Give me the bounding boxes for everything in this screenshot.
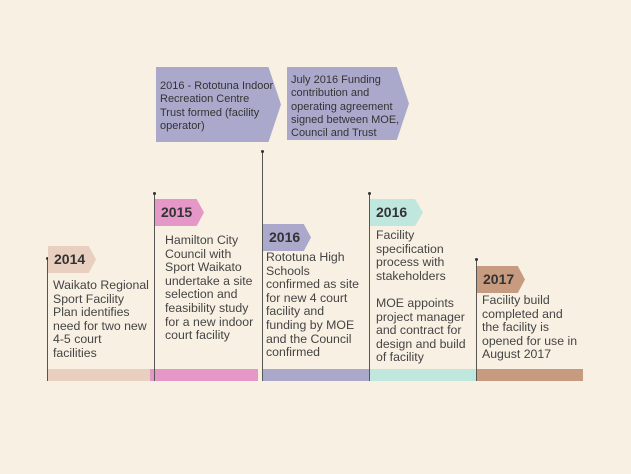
milestone 2014: 4-5 court bbox=[53, 332, 102, 346]
milestone 2016 specification: Facility bbox=[376, 228, 414, 242]
milestone 2014: 2014 bbox=[54, 251, 85, 267]
milestone 2016 high schools bbox=[263, 224, 359, 359]
milestone 2016 high schools: facility and bbox=[266, 304, 324, 318]
top box: funding agreement: operating agreement bbox=[291, 101, 393, 113]
milestone 2015: 2015 bbox=[161, 204, 192, 220]
milestone 2014: facilities bbox=[53, 346, 97, 360]
milestone 2017: August 2017 bbox=[482, 347, 551, 361]
milestone 2017 bbox=[477, 266, 577, 361]
milestone 2016 high schools: for new 4 court bbox=[266, 291, 347, 305]
top box: trust formed: operator) bbox=[160, 120, 205, 132]
milestone 2016 high schools: and the Council bbox=[266, 332, 351, 346]
milestone 2017: 2017 bbox=[483, 271, 514, 287]
top box: trust formed: Trust formed (facility bbox=[160, 107, 259, 119]
top box: funding agreement: July 2016 Funding bbox=[291, 74, 381, 86]
milestone 2016 specification: 2016 bbox=[376, 204, 407, 220]
milestone 2017: opened for use in bbox=[482, 334, 577, 348]
milestone 2016 specification: and contract for bbox=[376, 323, 461, 337]
milestone 2017: Facility build bbox=[482, 293, 550, 307]
milestone 2016 specification: stakeholders bbox=[376, 269, 446, 283]
milestone 2015: selection and bbox=[165, 287, 237, 301]
milestone 2014: Waikato Regional bbox=[53, 278, 149, 292]
milestone 2016 high schools: 2016 bbox=[269, 229, 300, 245]
milestone 2014: need for two new bbox=[53, 319, 147, 333]
milestone 2016 specification: of facility bbox=[376, 350, 424, 364]
milestone 2014 bbox=[48, 246, 149, 360]
top box: trust formed: Recreation Centre bbox=[160, 93, 249, 105]
milestone 2015: undertake a site bbox=[165, 274, 253, 288]
milestone 2017: the facility is bbox=[482, 320, 549, 334]
milestone 2016 specification bbox=[370, 199, 466, 364]
top box: funding agreement: signed between MOE, bbox=[291, 114, 399, 126]
top box: trust formed bbox=[156, 67, 281, 142]
top box: funding agreement bbox=[287, 67, 409, 140]
milestone 2016 specification: process with bbox=[376, 255, 444, 269]
milestone 2017: completed and bbox=[482, 307, 563, 321]
timeline bar bbox=[48, 369, 583, 381]
top box: funding agreement: contribution and bbox=[291, 87, 369, 99]
milestone 2016 high schools: Schools bbox=[266, 264, 310, 278]
milestone 2016 high schools: Rototuna High bbox=[266, 250, 345, 264]
milestone 2014: Plan identifies bbox=[53, 305, 130, 319]
milestone 2014: Sport Facility bbox=[53, 292, 124, 306]
milestone 2015 bbox=[155, 199, 253, 342]
milestone 2015: feasibility study bbox=[165, 301, 248, 315]
milestone 2016 high schools: funding by MOE bbox=[266, 318, 354, 332]
milestone 2016 specification: specification bbox=[376, 242, 444, 256]
milestone 2016 high schools: confirmed as site bbox=[266, 277, 359, 291]
milestone 2015: Hamilton City bbox=[165, 233, 238, 247]
milestone 2015: Sport Waikato bbox=[165, 260, 242, 274]
milestone 2015: court facility bbox=[165, 328, 230, 342]
milestone 2015: Council with bbox=[165, 247, 231, 261]
top box: funding agreement: Council and Trust bbox=[291, 127, 377, 139]
milestone 2016 high schools: confirmed bbox=[266, 345, 320, 359]
top box: trust formed: 2016 - Rototuna Indoor bbox=[160, 80, 273, 92]
milestone 2016 specification: MOE appoints bbox=[376, 296, 454, 310]
milestone 2016 specification: project manager bbox=[376, 310, 465, 324]
milestone 2016 specification: design and build bbox=[376, 337, 466, 351]
milestone 2015: for a new indoor bbox=[165, 315, 253, 329]
